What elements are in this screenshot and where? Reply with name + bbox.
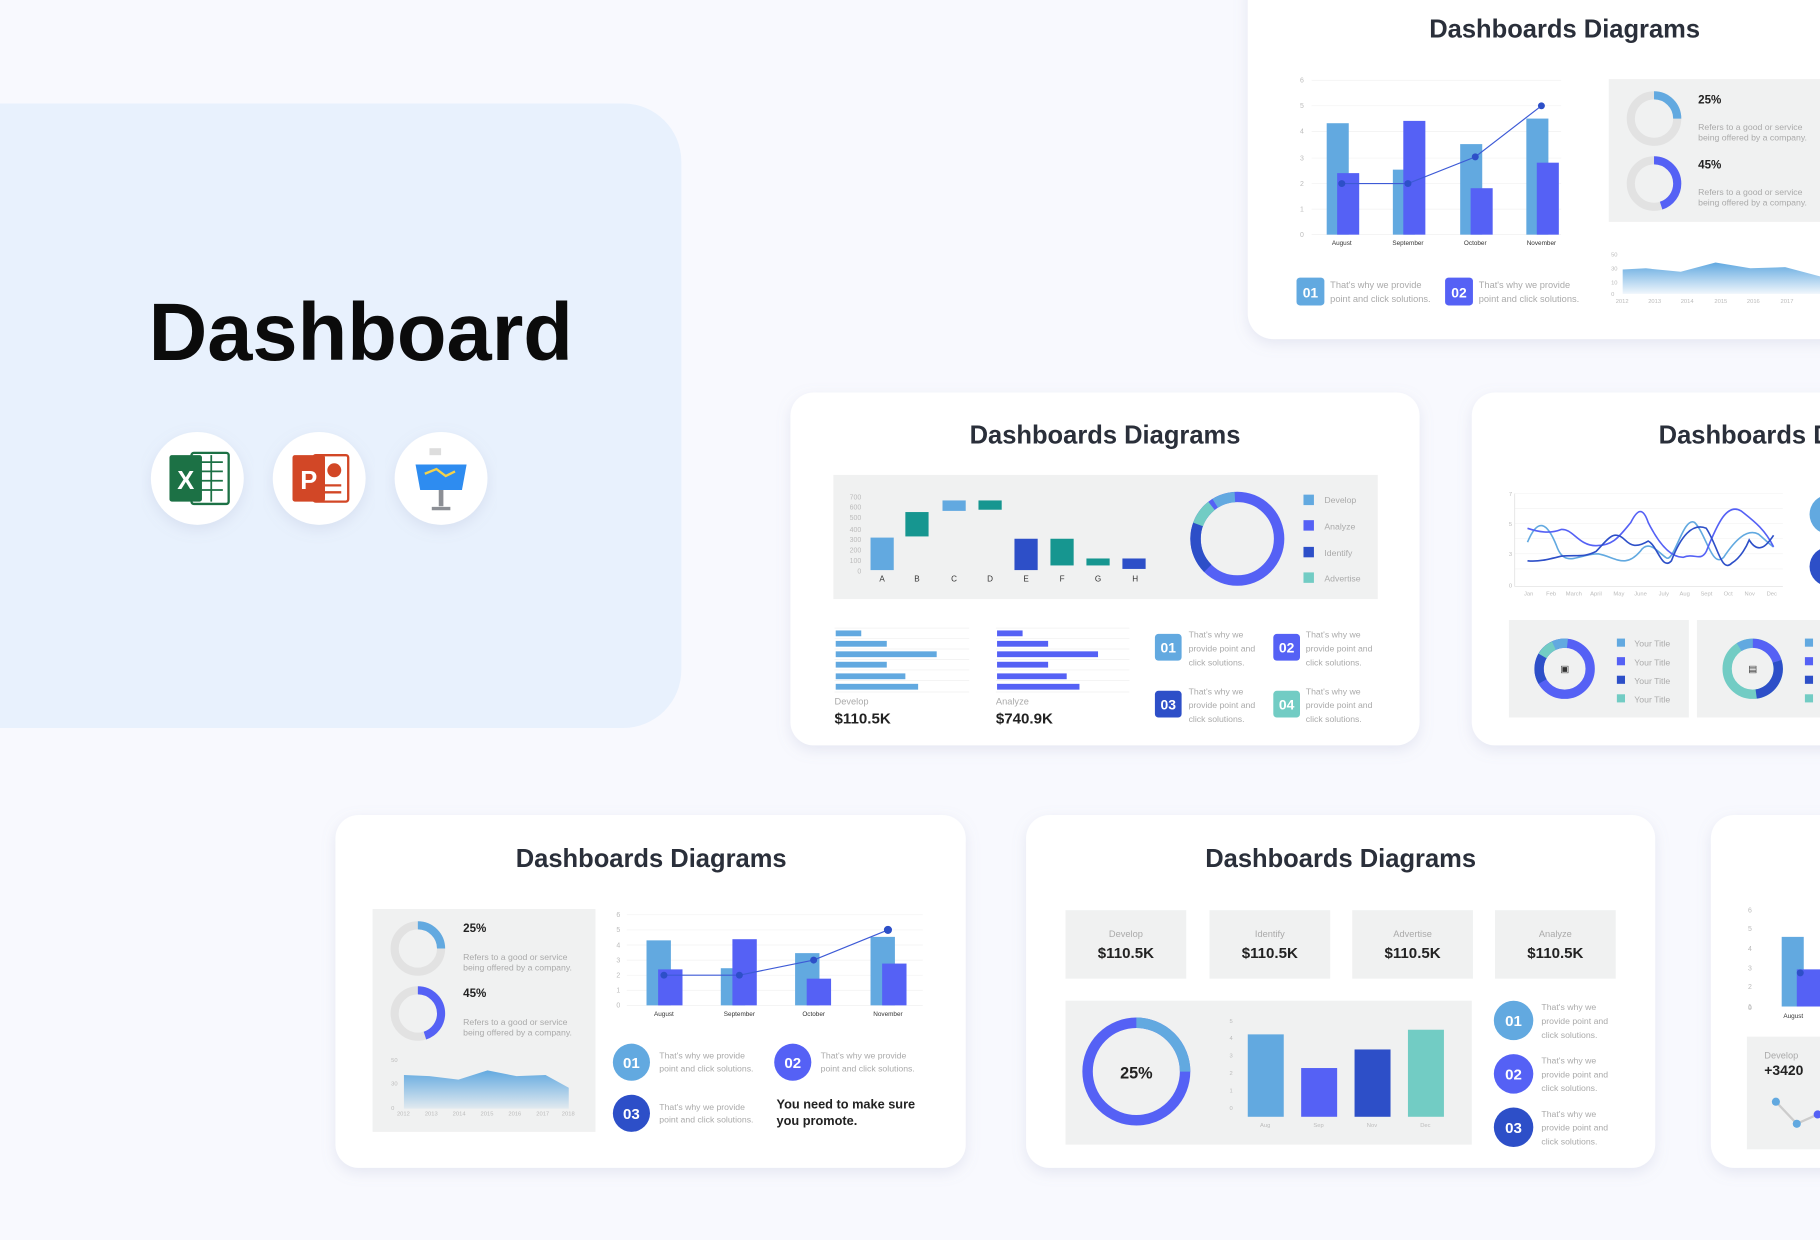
combo bar chart: 3: [616, 957, 620, 964]
combo bar chart: 4: [616, 942, 620, 949]
area chart: 2017: [1781, 299, 1793, 305]
donut stats panel: Refers to a good or service: [1698, 187, 1803, 197]
combo bar chart: 1: [616, 988, 620, 995]
icon: excel: [151, 432, 244, 525]
badges 01 02: point and click solutions.: [1330, 294, 1431, 304]
line chart: 3: [1509, 552, 1512, 558]
card F: partial bottom right: Develop: [1764, 1051, 1798, 1061]
combo bar chart: [1300, 78, 1561, 247]
combo bar chart: 2: [1300, 181, 1304, 188]
line chart: Dec: [1767, 592, 1777, 598]
card F: partial bottom right: 1: [1748, 1004, 1752, 1011]
donut legend panel 1: Your Title: [1634, 639, 1670, 649]
area chart: [1611, 253, 1820, 305]
line chart: Feb: [1546, 592, 1556, 598]
combo bar chart: September: [724, 1011, 756, 1018]
title: Dashboards Diagrams: [970, 422, 1240, 450]
numbered badges 01-04: 01: [1161, 639, 1176, 655]
KPI boxes: Analyze: [1539, 929, 1572, 939]
waterfall + donut panel: 600: [850, 505, 861, 512]
stats panel: 2012: [397, 1112, 410, 1118]
donut + bar chart panel: 5: [1229, 1019, 1233, 1025]
donut + bar chart panel: [1066, 1001, 1472, 1145]
waterfall + donut panel: E: [1023, 575, 1029, 584]
numbered circles: That's why we: [1541, 1055, 1596, 1065]
numbered circles: provide point and: [1541, 1069, 1608, 1079]
badges 01 02: 01: [1303, 284, 1318, 300]
combo bar chart: 0: [616, 1003, 620, 1010]
combo bar chart: 5: [1300, 103, 1304, 110]
horizontal bars develop: $110.5K: [835, 710, 891, 727]
donut stats panel: being offered by a company.: [1698, 133, 1807, 143]
numbered circles: click solutions.: [1541, 1030, 1597, 1040]
KPI boxes: Develop: [1109, 929, 1143, 939]
numbered badges 01-04: click solutions.: [1306, 714, 1362, 724]
combo bar chart: 0: [1300, 232, 1304, 239]
stats panel: 25%: [463, 922, 486, 935]
waterfall + donut panel: 0: [857, 569, 861, 576]
numbered circles: 01: [1505, 1013, 1522, 1030]
line chart: July: [1659, 592, 1669, 598]
numbered badges 01-04: That's why we: [1189, 686, 1244, 696]
donut legend panel 1: Your Title: [1634, 657, 1670, 667]
badges 01 02: 02: [1451, 284, 1467, 300]
combo bar chart: [616, 912, 923, 1018]
horizontal bars develop: Develop: [835, 697, 869, 707]
numbered circles: 03: [1505, 1120, 1522, 1137]
line chart: Oct: [1724, 592, 1733, 598]
donut + bar chart panel: Aug: [1260, 1123, 1270, 1129]
KPI boxes: Identify: [1255, 929, 1285, 939]
waterfall + donut panel: Identify: [1324, 548, 1353, 558]
area chart: 50: [1611, 253, 1618, 259]
badges 01 02: point and click solutions.: [1479, 294, 1579, 304]
card F: partial bottom right: 4: [1748, 946, 1752, 953]
combo bar chart: September: [1392, 240, 1424, 247]
donut legend panel 1: ▣: [1560, 664, 1569, 674]
stats panel: 2018: [562, 1112, 575, 1118]
stats panel: 2016: [508, 1112, 521, 1118]
numbered circles: That's why we: [1541, 1109, 1596, 1119]
combo bar chart: 2: [616, 973, 620, 980]
area chart: 2013: [1648, 299, 1661, 305]
numbered circles: click solutions.: [1541, 1137, 1597, 1147]
side circles: [1810, 495, 1820, 534]
badges 01 02: That's why we provide: [1479, 280, 1570, 290]
waterfall + donut panel: 700: [850, 494, 861, 501]
numbered badges 01-04: 04: [1279, 696, 1295, 712]
card F: partial bottom right: [1711, 815, 1820, 1168]
card F: partial bottom right: 3: [1748, 966, 1752, 973]
numbered circles + callout: point and click solutions.: [659, 1064, 753, 1074]
area chart: 10: [1611, 281, 1618, 287]
numbered circles: provide point and: [1541, 1123, 1608, 1133]
numbered circles + callout: 01: [623, 1055, 640, 1072]
badges 01 02: That's why we provide: [1330, 280, 1422, 290]
numbered badges 01-04: 02: [1279, 639, 1295, 655]
stats panel: being offered by a company.: [463, 963, 572, 973]
donut legend panel 2: ▤: [1748, 664, 1757, 674]
card C: line chart dashboard: [1472, 392, 1820, 745]
waterfall + donut panel: D: [987, 575, 993, 584]
numbered badges 01-04: That's why we: [1306, 686, 1361, 696]
numbered circles + callout: you promote.: [777, 1113, 857, 1128]
combo bar chart: 6: [616, 912, 620, 919]
title: Dashboards Diagrams: [516, 845, 787, 873]
numbered circles: That's why we: [1541, 1002, 1596, 1012]
waterfall + donut panel: 200: [850, 548, 861, 555]
waterfall + donut panel: 100: [850, 558, 861, 565]
card F: partial bottom right: August: [1783, 1013, 1803, 1020]
donut + bar chart panel: Nov: [1367, 1123, 1377, 1129]
numbered circles + callout: point and click solutions.: [821, 1064, 915, 1074]
title: Dashboards Diagrams: [1429, 15, 1700, 43]
card F: partial bottom right: 2: [1748, 984, 1752, 991]
KPI boxes: $110.5K: [1242, 945, 1298, 962]
numbered circles + callout: point and click solutions.: [659, 1115, 753, 1125]
area chart: 0: [1611, 292, 1614, 298]
line chart: June: [1634, 592, 1647, 598]
KPI boxes: $110.5K: [1384, 945, 1441, 962]
donut + bar chart panel: Dec: [1420, 1123, 1431, 1129]
line chart: Aug: [1680, 592, 1690, 598]
combo bar chart: August: [1332, 240, 1352, 247]
combo bar chart: 4: [1300, 129, 1304, 136]
numbered circles + callout: 03: [623, 1106, 640, 1123]
numbered circles + callout: That's why we provide: [659, 1102, 745, 1112]
icon: powerpoint: [273, 432, 366, 525]
stats panel: 2014: [453, 1112, 466, 1118]
stats panel: 0: [391, 1106, 394, 1112]
numbered badges 01-04: provide point and: [1189, 643, 1255, 653]
numbered badges 01-04: That's why we: [1189, 629, 1244, 639]
numbered circles: [1494, 1001, 1608, 1147]
waterfall + donut panel: [833, 475, 1378, 599]
combo bar chart: October: [1464, 240, 1487, 247]
left hero panel: [0, 103, 681, 728]
stats panel: being offered by a company.: [463, 1028, 572, 1038]
line chart: Jan: [1524, 592, 1533, 598]
donut stats panel: [1609, 79, 1820, 222]
numbered circles + callout: 02: [784, 1055, 801, 1072]
card F: partial bottom right: 0: [1748, 1005, 1752, 1012]
numbered badges 01-04: provide point and: [1306, 643, 1373, 653]
waterfall + donut panel: G: [1095, 575, 1101, 584]
KPI boxes: $110.5K: [1527, 945, 1584, 962]
horizontal bars analyze: $740.9K: [996, 710, 1053, 727]
card F: partial bottom right: 6: [1748, 908, 1752, 915]
card F: partial bottom right: 5: [1748, 926, 1752, 933]
numbered circles: click solutions.: [1541, 1083, 1597, 1093]
numbered badges 01-04: That's why we: [1306, 629, 1361, 639]
donut stats panel: being offered by a company.: [1698, 198, 1807, 208]
area chart: 2012: [1616, 299, 1629, 305]
waterfall + donut panel: 500: [850, 515, 861, 522]
combo bar chart: 3: [1300, 155, 1304, 162]
numbered circles + callout: That's why we provide: [821, 1051, 906, 1061]
waterfall + donut panel: Analyze: [1324, 521, 1355, 531]
area chart: 2015: [1714, 299, 1727, 305]
donut + bar chart panel: 1: [1229, 1088, 1233, 1094]
donut stats panel: 45%: [1698, 158, 1721, 171]
combo bar chart: October: [802, 1011, 826, 1018]
numbered badges 01-04: click solutions.: [1189, 657, 1245, 667]
stats panel: Refers to a good or service: [463, 1017, 568, 1027]
stats panel: 45%: [463, 987, 486, 1000]
stats panel: Refers to a good or service: [463, 952, 568, 962]
numbered circles + callout: You need to make sure: [777, 1097, 915, 1112]
card E: KPI dashboard: [1026, 815, 1655, 1168]
waterfall + donut panel: F: [1060, 575, 1065, 584]
donut legend panel 1: Your Title: [1634, 676, 1670, 686]
icon: excel: X: [177, 467, 194, 495]
combo bar chart: November: [1527, 240, 1557, 247]
KPI boxes: Advertise: [1393, 929, 1432, 939]
area chart: 2016: [1747, 299, 1760, 305]
line chart: May: [1613, 592, 1624, 598]
icon: powerpoint: P: [300, 467, 317, 495]
stats panel: 50: [391, 1058, 398, 1064]
card D: bottom left dashboard: [335, 815, 966, 1168]
donut legend panel 1: [1509, 620, 1689, 718]
line chart: April: [1590, 592, 1602, 598]
numbered circles + callout: That's why we provide: [659, 1051, 745, 1061]
KPI boxes: $110.5K: [1098, 945, 1154, 962]
donut + bar chart panel: Sep: [1313, 1123, 1324, 1129]
combo bar chart: 1: [1300, 206, 1304, 213]
icon: keynote: [395, 432, 488, 525]
numbered badges 01-04: provide point and: [1189, 700, 1255, 710]
KPI boxes: [1066, 910, 1616, 979]
stats panel: 2015: [481, 1112, 493, 1118]
stats panel: [373, 909, 595, 1132]
card F: partial bottom right: +3420: [1764, 1062, 1804, 1078]
stats panel: 2013: [425, 1112, 438, 1118]
area chart: 30: [1611, 267, 1618, 273]
horizontal bars develop: [835, 628, 969, 727]
donut legend panel 1: Your Title: [1634, 694, 1670, 704]
line chart: Sept: [1700, 592, 1713, 598]
combo bar chart: August: [654, 1011, 674, 1018]
donut + bar chart panel: 3: [1229, 1054, 1233, 1060]
numbered badges 01-04: 03: [1161, 696, 1176, 712]
donut stats panel: Refers to a good or service: [1698, 122, 1803, 132]
donut + bar chart panel: 0: [1229, 1106, 1233, 1112]
numbered badges 01-04: [1155, 629, 1373, 724]
waterfall + donut panel: Develop: [1324, 495, 1356, 505]
waterfall + donut panel: 300: [850, 537, 861, 544]
stats panel: 2017: [536, 1112, 549, 1118]
numbered badges 01-04: click solutions.: [1189, 714, 1245, 724]
area chart: 2014: [1681, 299, 1694, 305]
stats panel: 30: [391, 1081, 398, 1087]
numbered circles: provide point and: [1541, 1016, 1608, 1026]
waterfall + donut panel: B: [914, 575, 920, 584]
waterfall + donut panel: C: [951, 575, 957, 584]
donut stats panel: 25%: [1698, 93, 1721, 106]
card B: waterfall dashboard: [790, 392, 1420, 745]
combo bar chart: November: [873, 1011, 904, 1018]
donut + bar chart panel: 4: [1229, 1036, 1233, 1042]
donut + bar chart panel: 25%: [1120, 1064, 1153, 1082]
numbered circles: 02: [1505, 1067, 1522, 1084]
title: Dashboards Diagrams: [1205, 845, 1476, 873]
line chart: 0: [1509, 583, 1512, 589]
card A: top right dashboard: [1248, 0, 1820, 339]
waterfall + donut panel: 400: [850, 527, 861, 534]
horizontal bars analyze: Analyze: [996, 697, 1029, 707]
donut legend panel 2: [1697, 620, 1820, 718]
title: Dashboard: Dashboard: [149, 287, 573, 378]
waterfall + donut panel: H: [1132, 575, 1138, 584]
line chart: March: [1566, 592, 1582, 598]
numbered circles + callout: [613, 1044, 915, 1132]
line chart: [1509, 492, 1783, 598]
line chart: Nov: [1745, 592, 1755, 598]
line chart: 5: [1509, 522, 1512, 528]
waterfall + donut panel: Advertise: [1324, 574, 1361, 584]
waterfall + donut panel: A: [879, 575, 885, 584]
numbered badges 01-04: provide point and: [1306, 700, 1373, 710]
combo bar chart: 5: [616, 927, 620, 934]
combo bar chart: 6: [1300, 78, 1304, 85]
donut + bar chart panel: 2: [1229, 1071, 1233, 1077]
numbered badges 01-04: click solutions.: [1306, 657, 1362, 667]
badges 01 02: [1297, 278, 1579, 305]
line chart: 7: [1509, 492, 1512, 498]
horizontal bars analyze: [996, 628, 1129, 727]
